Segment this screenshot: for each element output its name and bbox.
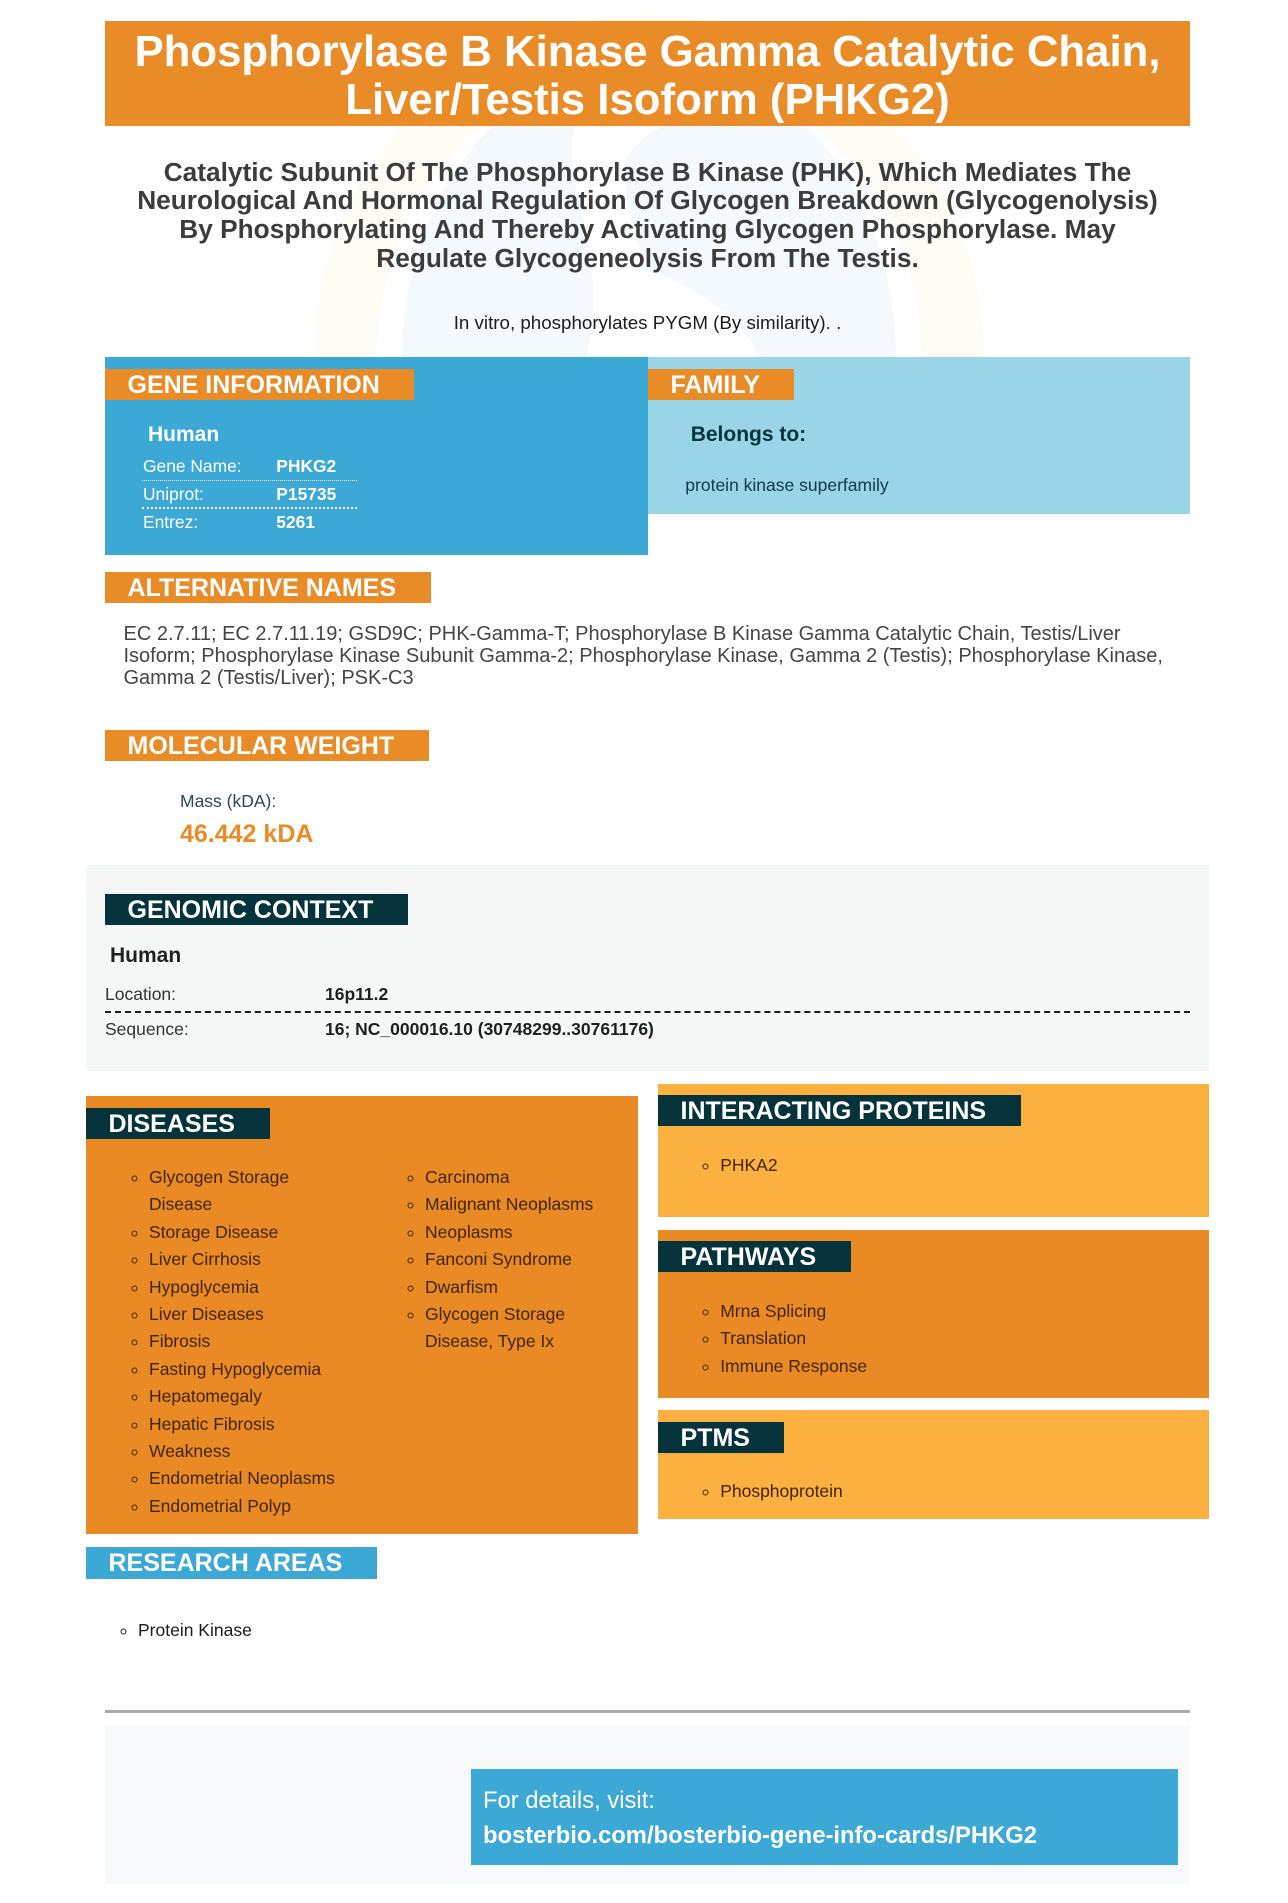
callout url: bosterbio.com/bosterbio-gene-info-cards/PHKG2 — [483, 1822, 1037, 1849]
species label: Human — [110, 944, 181, 967]
uniprot row: Uniprot: — [143, 484, 204, 504]
title: Liver/Testis Isoform (PHKG2) — [345, 75, 950, 124]
panel: diseases — [86, 1096, 638, 1534]
heading: diseases — [86, 1108, 270, 1139]
background watermark — [314, 14, 984, 357]
subtitle: Catalytic Subunit Of The Phosphorylase B Kinase (PHK), Which Mediates The — [164, 156, 1131, 186]
gene name row: Gene Name: — [143, 456, 242, 476]
heading: molecular weight: MOLECULAR WEIGHT — [128, 732, 394, 760]
entrez row: Entrez: — [143, 512, 198, 532]
panel: ptms — [658, 1410, 1209, 1519]
entrez row: 5261 — [276, 512, 315, 532]
heading: interacting proteins: INTERACTING PROTEINS — [680, 1097, 986, 1125]
gene name row: PHKG2 — [276, 456, 336, 476]
location row — [105, 984, 388, 1004]
alternative names text — [124, 622, 1163, 688]
callout label: For details, visit: — [483, 1786, 655, 1814]
panel: genomic context: 16p11.2 — [325, 984, 388, 1004]
subtitle — [137, 156, 1158, 273]
disease list column 1: Fibrosis — [149, 1331, 210, 1351]
subtitle: By Phosphorylating And Thereby Activating Glycogen Phosphorylase. May — [179, 214, 1116, 244]
disease list column 2 — [408, 1167, 593, 1351]
entrez row — [143, 512, 315, 532]
family value: protein kinase superfamily — [685, 475, 889, 495]
uniprot row: P15735 — [276, 484, 336, 504]
disease list column 1: Liver Diseases — [149, 1304, 264, 1324]
title — [105, 21, 1190, 126]
belongs to label: Belongs to: — [691, 423, 806, 446]
heading: alternative names: ALTERNATIVE NAMES — [128, 574, 396, 602]
mass value: 46.442 kDA — [180, 820, 313, 848]
interacting proteins list: PHKA2 — [720, 1155, 778, 1175]
gene name row — [143, 456, 336, 476]
heading: research areas: RESEARCH AREAS — [108, 1549, 342, 1577]
disease list column 1: Storage Disease — [149, 1222, 278, 1242]
disease list column 1: Fasting Hypoglycemia — [149, 1359, 321, 1379]
disease list column 1: Hypoglycemia — [149, 1277, 259, 1297]
panel: interacting proteins — [658, 1084, 1209, 1217]
pathways list: Immune Response — [720, 1356, 867, 1376]
disease list column 1: Hepatic Fibrosis — [149, 1414, 274, 1434]
disease list column 2: Glycogen Storage Disease, Type Ix — [425, 1304, 565, 1351]
sequence row — [105, 1018, 654, 1038]
species label: Human — [148, 423, 219, 446]
disease list column 1: Endometrial Neoplasms — [149, 1468, 335, 1488]
disease list column 2: Neoplasms — [425, 1222, 513, 1242]
mass label: Mass (kDA): — [180, 791, 276, 811]
panel: pathways — [658, 1230, 1209, 1398]
alternative names text: EC 2.7.11; EC 2.7.11.19; GSD9C; PHK-Gamma-T; Phosphorylase B Kinase Gamma Catalytic Chain, Testis/Liver — [124, 622, 1121, 644]
disease list column 1: Hepatomegaly — [149, 1386, 262, 1406]
heading: diseases: DISEASES — [108, 1110, 235, 1138]
uniprot row — [143, 484, 336, 504]
heading: ptms — [658, 1422, 784, 1453]
disease list column 2: Dwarfism — [425, 1277, 498, 1297]
pathways list: Mrna Splicing — [720, 1301, 826, 1321]
alternative names text: Gamma 2 (Testis/Liver); PSK-C3 — [124, 666, 414, 688]
panel: genomic context: 16; NC_000016.10 (30748299..30761176) — [325, 1018, 654, 1038]
heading: family — [648, 369, 794, 400]
panel: genomic context — [86, 865, 1209, 1071]
disease list column 2: Malignant Neoplasms — [425, 1194, 593, 1214]
callout: details link — [471, 1769, 1178, 1865]
disease list column 1: Liver Cirrhosis — [149, 1249, 261, 1269]
disease list column 2: Fanconi Syndrome — [425, 1249, 572, 1269]
subtitle: Regulate Glycogeneolysis From The Testis. — [376, 243, 919, 273]
heading: ptms: PTMS — [680, 1424, 750, 1452]
panel: family — [648, 357, 1190, 514]
disease list column 1: Weakness — [149, 1441, 230, 1461]
disease list column 1: Glycogen Storage Disease — [149, 1167, 289, 1214]
heading: pathways — [658, 1241, 851, 1272]
alternative names text: Isoform; Phosphorylase Kinase Subunit Gamma-2; Phosphorylase Kinase, Gamma 2 (Testis); Phosphorylase Kinase, — [124, 644, 1163, 666]
disease list column 1 — [132, 1167, 335, 1516]
function note: In vitro, phosphorylates PYGM (By similarity). . — [454, 312, 841, 333]
pathways list — [702, 1301, 867, 1376]
panel: gene information — [105, 357, 648, 555]
disease list column 2: Carcinoma — [425, 1167, 510, 1187]
heading: pathways: PATHWAYS — [680, 1243, 816, 1271]
disease list column 1: Endometrial Polyp — [149, 1496, 291, 1516]
location row: Location: — [105, 984, 176, 1004]
heading: family: FAMILY — [670, 371, 760, 399]
subtitle: Neurological And Hormonal Regulation Of Glycogen Breakdown (Glycogenolysis) — [137, 185, 1158, 215]
heading: genomic context: GENOMIC CONTEXT — [128, 896, 373, 924]
sequence row: Sequence: — [105, 1018, 189, 1038]
title: Phosphorylase B Kinase Gamma Catalytic Chain, — [134, 27, 1161, 76]
pathways list: Translation — [720, 1328, 806, 1348]
ptms list: Phosphoprotein — [720, 1481, 843, 1501]
heading: gene information: GENE INFORMATION — [128, 371, 380, 399]
research areas list: Protein Kinase — [138, 1620, 252, 1640]
panel: footer — [105, 1725, 1190, 1884]
